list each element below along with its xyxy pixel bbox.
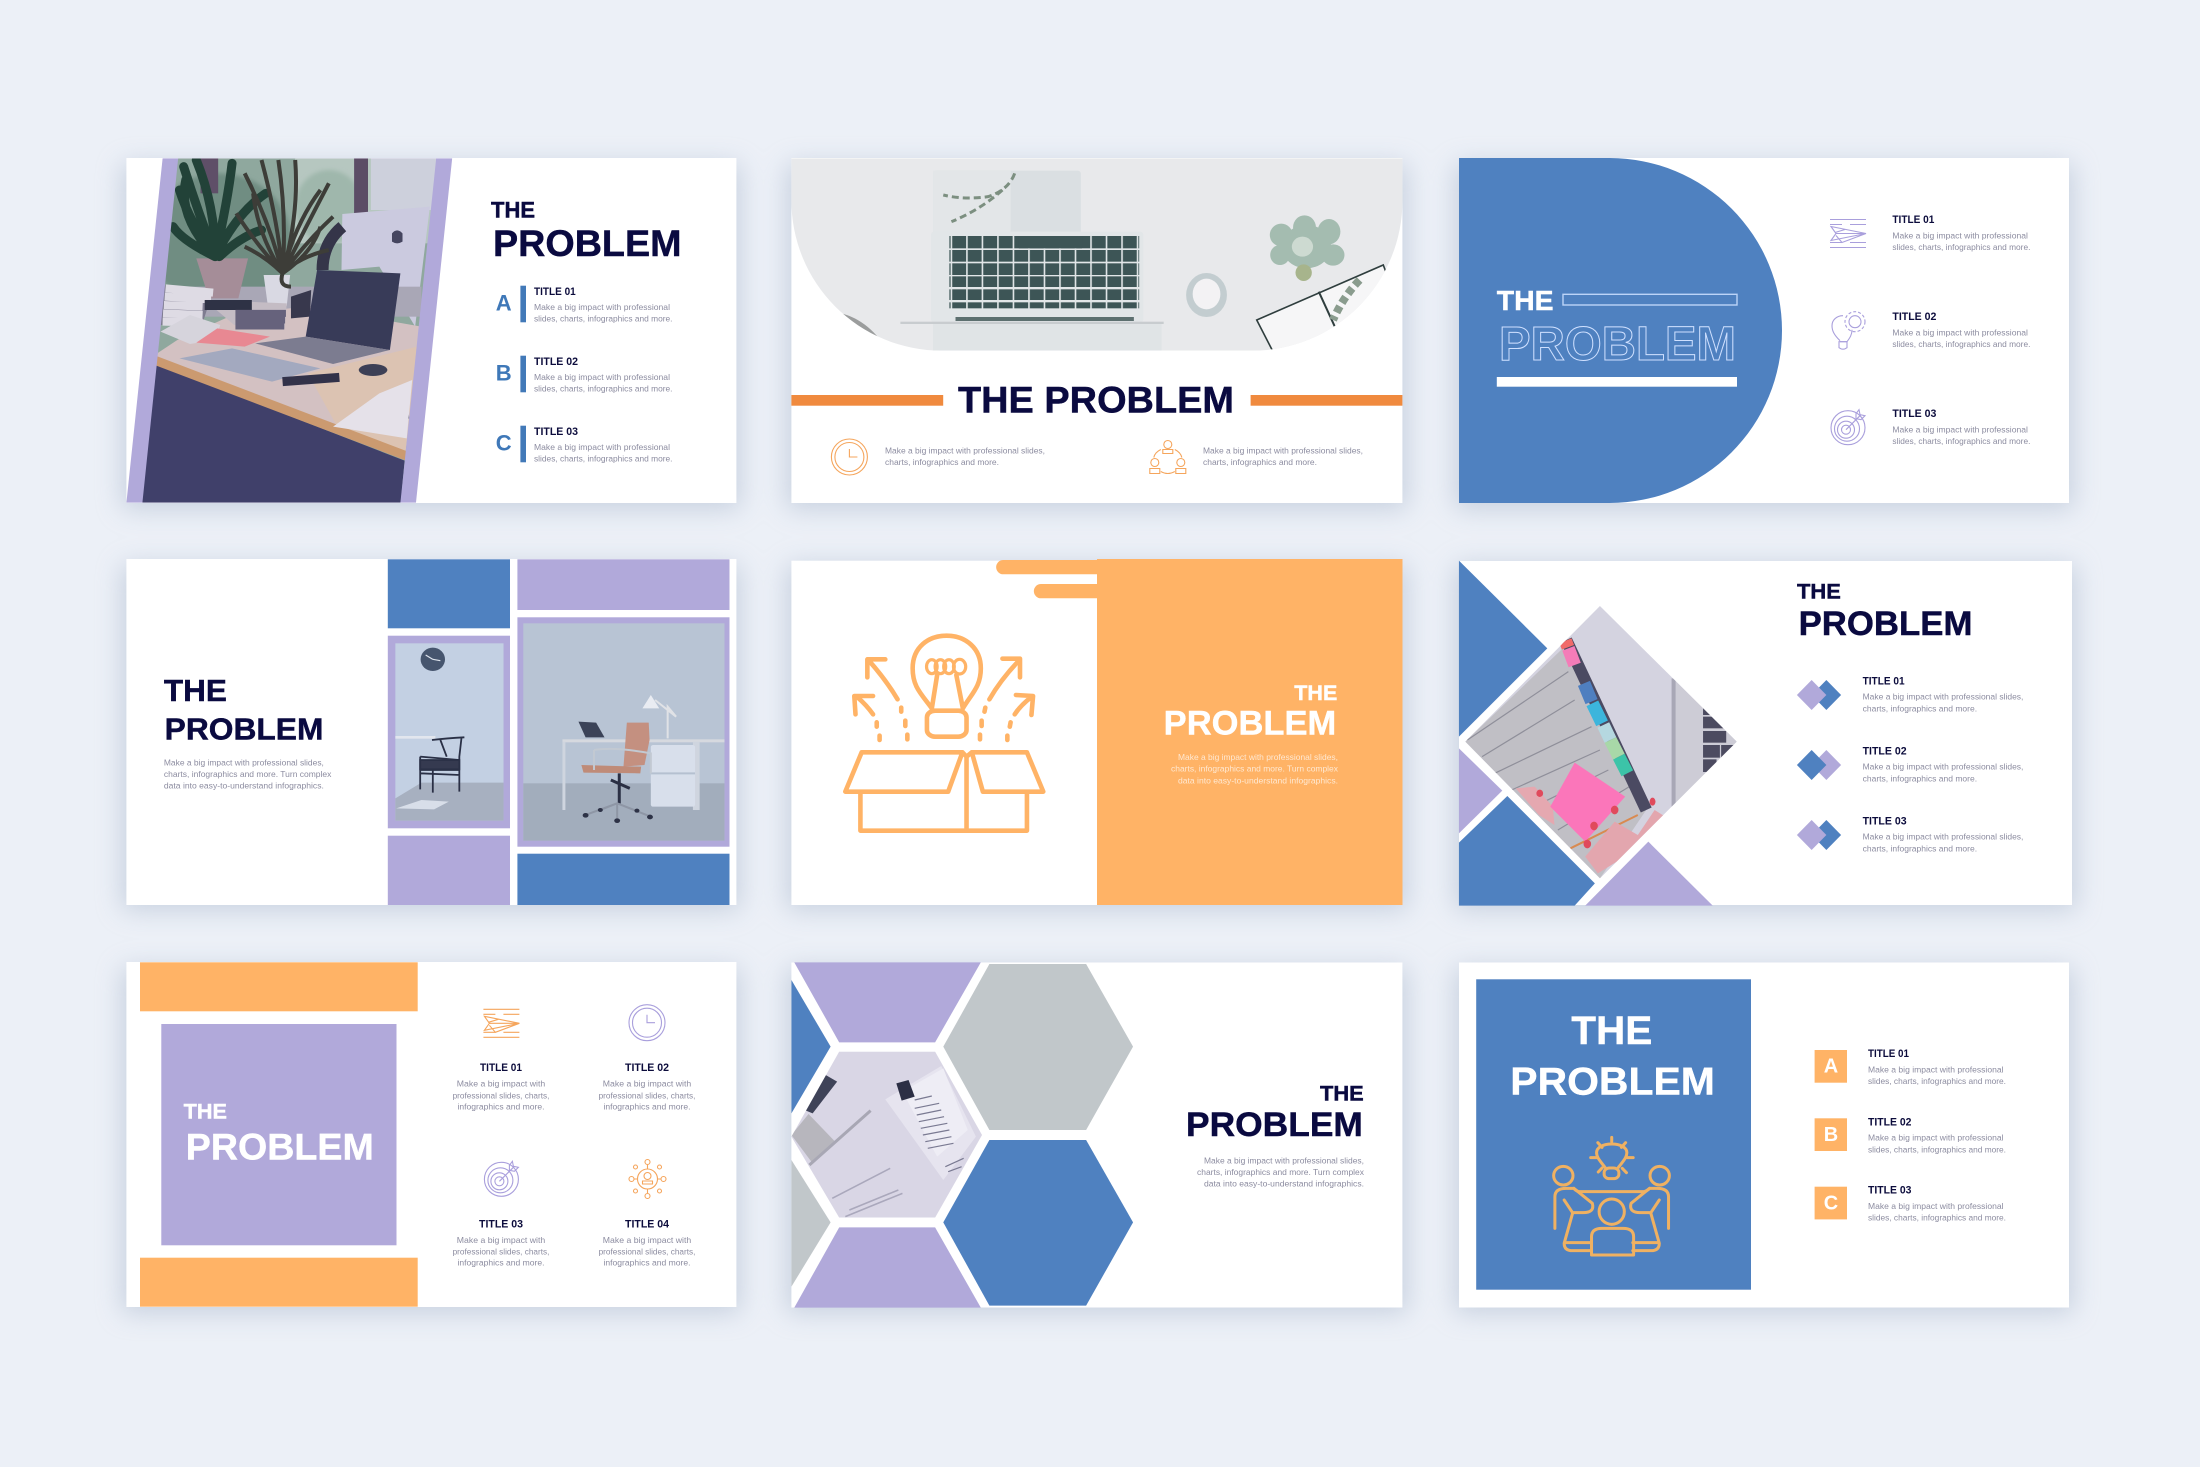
photo: documents and laptop on desk — [788, 1050, 984, 1220]
mosaic tiles — [388, 559, 730, 905]
item 1: TITLE 01 — [1863, 675, 1905, 687]
text block left: charts, infographics and more. — [885, 457, 999, 467]
text block: data into easy-to-understand infographics. — [1204, 1178, 1364, 1188]
icon: clock — [831, 439, 867, 475]
list item A: slides, charts, infographics and more. — [534, 314, 672, 324]
photo: notebook with pink sticky note — [1461, 603, 1739, 880]
heading: the problem: PROBLEM — [186, 1126, 374, 1167]
item 1: Make a big impact with professional slides, — [1863, 692, 2023, 702]
item B: slides, charts, infographics and more. — [1868, 1144, 2006, 1154]
item 2 — [1832, 311, 2030, 349]
item 3: TITLE 03 — [1863, 815, 1907, 827]
list item A: TITLE 01 — [534, 286, 576, 298]
item 4: infographics and more. — [604, 1258, 690, 1268]
icon: target — [1831, 410, 1865, 445]
heading: the problem: THE — [184, 1099, 227, 1123]
list item B: TITLE 02 — [534, 356, 578, 368]
list item B: slides, charts, infographics and more. — [534, 384, 672, 394]
panel: slide 9 blue block with team icon — [1459, 962, 2069, 1308]
heading: the problem — [1164, 681, 1337, 742]
heading: the problem: PROBLEM — [1799, 605, 1972, 643]
item 3: Make a big impact with professional slides, — [1863, 832, 2023, 842]
item 3: Make a big impact with — [457, 1235, 545, 1245]
panel: slide 7 lavender block with four items — [126, 962, 736, 1307]
item 1: professional slides, charts, — [453, 1090, 549, 1100]
item 3: Make a big impact with professional — [1892, 424, 2028, 434]
text block: Make a big impact with professional slides, — [164, 757, 324, 767]
text block: charts, infographics and more. Turn complex — [164, 769, 332, 779]
heading: the problem: THE PROBLEM — [958, 379, 1234, 421]
item 2: professional slides, charts, — [599, 1090, 695, 1100]
heading: the problem: THE — [1294, 681, 1337, 705]
item B — [1815, 1116, 2006, 1154]
item 2: TITLE 02 — [1863, 745, 1907, 757]
hexagon tiles — [791, 962, 1133, 1308]
list item C: Make a big impact with professional — [534, 442, 670, 452]
heading: the problem: PROBLEM — [165, 711, 323, 746]
list item A: Make a big impact with professional — [534, 302, 670, 312]
text block — [164, 757, 332, 790]
heading: the problem: PROBLEM — [1186, 1106, 1363, 1144]
heading: the problem — [491, 197, 682, 264]
icon: paper plane — [483, 1009, 519, 1037]
panel: slide 3 blue half circle — [1459, 158, 2069, 503]
item 2: TITLE 02 — [625, 1062, 669, 1074]
item B: Make a big impact with professional — [1868, 1133, 2004, 1143]
item 1 — [453, 1009, 549, 1111]
orange band top — [140, 962, 418, 1011]
item A: TITLE 01 — [1868, 1048, 1909, 1060]
text block: charts, infographics and more. Turn complex — [1171, 764, 1339, 774]
item B: TITLE 02 — [1868, 1116, 1911, 1128]
icon: bulb with gear — [1832, 312, 1865, 349]
photo: office desk and orange chair — [523, 623, 724, 841]
item 1: slides, charts, infographics and more. — [1892, 242, 2030, 252]
heading: the problem: THE — [1797, 579, 1841, 603]
icon: light bulb rising from open box — [845, 636, 1043, 831]
photo: laptop on white desk — [788, 157, 1404, 353]
text block — [1171, 752, 1339, 785]
text block: data into easy-to-understand infographics. — [164, 780, 324, 790]
item 3: infographics and more. — [458, 1258, 544, 1268]
list item B: Make a big impact with professional — [534, 372, 670, 382]
text block — [1197, 1155, 1365, 1188]
icon: people — [1150, 440, 1186, 474]
item 4: TITLE 04 — [625, 1218, 670, 1230]
white bar — [1497, 377, 1737, 387]
panel: slide 2 laptop photo with centered heading — [788, 157, 1404, 503]
item A: A — [1824, 1056, 1838, 1078]
icon: team around table with idea — [1554, 1137, 1669, 1255]
item C: Make a big impact with professional — [1868, 1201, 2004, 1211]
panel: slide 1 photo with A B C list — [126, 157, 736, 507]
heading: the: THE — [1497, 285, 1554, 316]
item 2 — [599, 1005, 695, 1111]
item 1: Make a big impact with professional — [1892, 230, 2028, 240]
item A: slides, charts, infographics and more. — [1868, 1076, 2006, 1086]
panel: slide 6 diamond photo — [1459, 561, 2072, 906]
item B: B — [1824, 1124, 1838, 1146]
icon: target — [484, 1161, 518, 1196]
text block right: Make a big impact with professional slides, — [1203, 445, 1363, 455]
lavender square — [161, 1024, 396, 1245]
item A: Make a big impact with professional — [1868, 1064, 2004, 1074]
heading: the problem: PROBLEM — [1164, 704, 1336, 742]
outlined bar — [1563, 294, 1737, 305]
item C — [1815, 1185, 2006, 1223]
item 4 — [599, 1160, 695, 1268]
icon: network — [629, 1160, 666, 1198]
item 1: infographics and more. — [458, 1101, 544, 1111]
list item C — [496, 426, 672, 464]
heading: the problem: PROBLEM — [493, 222, 682, 264]
list item A — [496, 286, 672, 324]
heading: problem outline: PROBLEM — [1499, 318, 1736, 371]
item C: slides, charts, infographics and more. — [1868, 1213, 2006, 1223]
heading: the problem — [164, 673, 323, 746]
list item C: TITLE 03 — [534, 426, 578, 438]
heading: the problem: THE — [1571, 1009, 1652, 1053]
blue block — [1476, 979, 1751, 1290]
item 2: Make a big impact with professional — [1892, 327, 2028, 337]
list item C: C — [496, 431, 512, 456]
item 3 — [1863, 815, 2023, 853]
heading: the problem: THE — [491, 197, 535, 222]
orange block — [996, 559, 1402, 905]
heading: the problem — [1186, 1082, 1364, 1144]
list item A: A — [496, 291, 512, 316]
item 3: slides, charts, infographics and more. — [1892, 436, 2030, 446]
item A — [1815, 1048, 2006, 1086]
item 1 — [1830, 214, 2030, 252]
item 1: TITLE 01 — [480, 1062, 522, 1074]
item 1: charts, infographics and more. — [1863, 703, 1977, 713]
photo: desk with plants and laptop — [126, 157, 452, 507]
text block: Make a big impact with professional slides, — [1178, 752, 1338, 762]
text block left: Make a big impact with professional slides, — [885, 445, 1045, 455]
heading: the problem — [184, 1099, 374, 1167]
item 3 — [1831, 408, 2030, 446]
icon: paper plane — [1830, 220, 1866, 248]
item 3: professional slides, charts, — [453, 1247, 549, 1257]
heading: the problem — [1510, 1009, 1715, 1103]
item 2: Make a big impact with — [603, 1079, 691, 1089]
heading: the problem: PROBLEM — [1510, 1060, 1715, 1103]
item 2: charts, infographics and more. — [1863, 773, 1977, 783]
item 2: slides, charts, infographics and more. — [1892, 339, 2030, 349]
list item C: slides, charts, infographics and more. — [534, 454, 672, 464]
item 3: charts, infographics and more. — [1863, 843, 1977, 853]
heading: the problem: THE — [164, 673, 227, 708]
text block left — [885, 445, 1045, 467]
text block right: charts, infographics and more. — [1203, 457, 1317, 467]
item 1: Make a big impact with — [457, 1079, 545, 1089]
item 4: Make a big impact with — [603, 1235, 691, 1245]
item 2: Make a big impact with professional slides, — [1863, 762, 2023, 772]
orange band bottom — [140, 1258, 418, 1307]
item 2 — [1863, 745, 2023, 783]
item 3: TITLE 03 — [479, 1218, 523, 1230]
text block: charts, infographics and more. Turn complex — [1197, 1167, 1365, 1177]
panel: slide 8 hexagons — [788, 962, 1402, 1308]
icon: clock — [629, 1005, 665, 1041]
list item B — [496, 356, 672, 394]
list item B: B — [496, 361, 512, 386]
item 1 — [1863, 675, 2023, 713]
item C: TITLE 03 — [1868, 1185, 1911, 1197]
item C: C — [1824, 1192, 1838, 1214]
text block right — [1203, 445, 1363, 467]
item 4: professional slides, charts, — [599, 1247, 695, 1257]
blue D shape — [1459, 158, 1782, 503]
heading: the problem: THE — [1320, 1082, 1364, 1106]
orange rule left — [791, 395, 943, 406]
item 2: TITLE 02 — [1892, 311, 1936, 323]
text block: Make a big impact with professional slides, — [1204, 1155, 1364, 1165]
item 2: infographics and more. — [604, 1101, 690, 1111]
item 3 — [453, 1161, 549, 1268]
panel: slide 4 office mosaic — [126, 559, 736, 905]
icons: double diamonds — [1797, 680, 1841, 850]
text block: data into easy-to-understand infographics. — [1178, 775, 1338, 785]
heading: the problem — [1797, 579, 1972, 643]
item 3: TITLE 03 — [1892, 408, 1936, 420]
item 1: TITLE 01 — [1892, 214, 1934, 226]
geometric shapes — [1459, 561, 1713, 906]
orange rule right — [1251, 395, 1402, 406]
photo: chair and clock — [395, 643, 504, 821]
panel: slide 5 orange idea box — [791, 559, 1402, 905]
